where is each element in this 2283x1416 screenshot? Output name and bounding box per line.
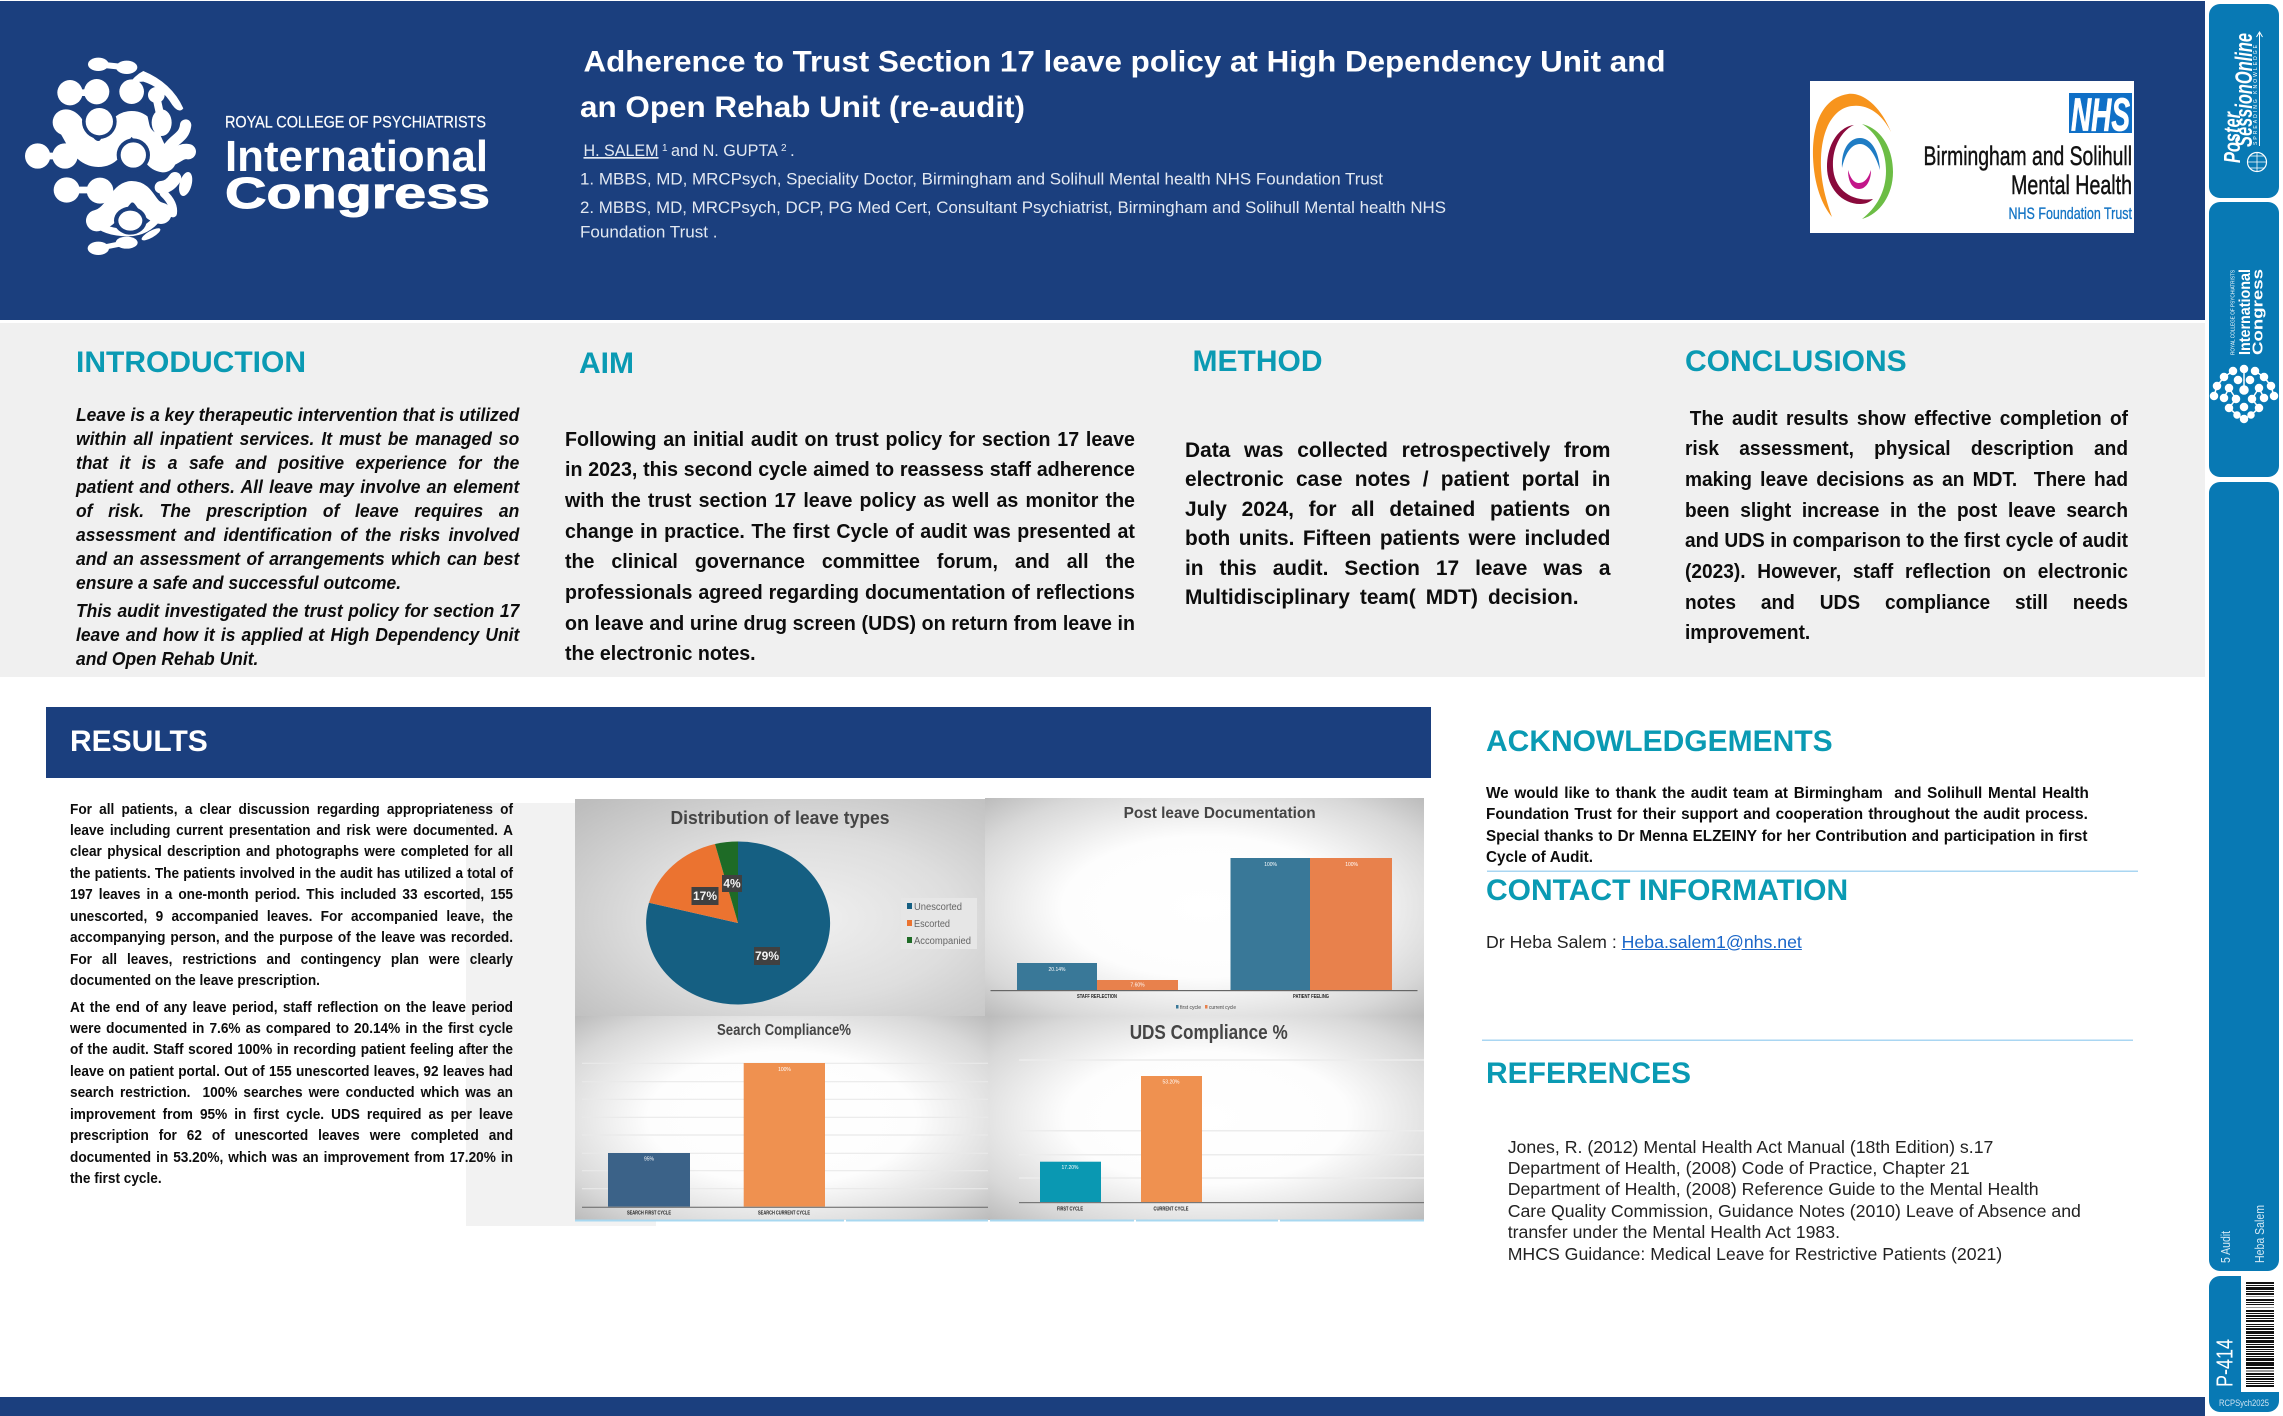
- chart: post leave documentation: 100%: [1345, 862, 1359, 868]
- logo: Birmingham and Solihull Mental Health NHS Foundation Trust: Birmingham and Solihull: [1924, 141, 2132, 171]
- chart: post leave documentation: PATIENT FEELING: [1293, 994, 1329, 1000]
- text block: introduction paragraph one: and an assessment of arrangements which can best: [76, 549, 519, 569]
- sidebar: Poster Session Online tab: Poster: [2219, 111, 2245, 163]
- chart: distribution of leave types: [575, 799, 988, 1016]
- authors and affiliations: and N. GUPTA: [671, 141, 779, 160]
- text block: acknowledgements: [1486, 785, 2089, 866]
- chart: post leave documentation: Post leave Documentation: [1124, 805, 1316, 822]
- heading: acknowledgements: ACKNOWLEDGEMENTS: [1486, 725, 1833, 758]
- chart: search compliance: 100%: [778, 1067, 791, 1073]
- chart: post leave documentation: 100%: [1264, 862, 1278, 868]
- text block: introduction paragraph one: patient and others. All leave may involve an element: [76, 477, 519, 497]
- text block: method: July 2024, for all detained patients on: [1184, 498, 1610, 521]
- text block: reference list: transfer under the Mental Health Act 1983.: [1508, 1222, 1840, 1242]
- text block: introduction paragraph two: and Open Rehab Unit.: [76, 649, 258, 669]
- text block: introduction paragraph one: of risk. The prescription of leave requires an: [76, 501, 519, 521]
- logo: Birmingham and Solihull Mental Health NHS Foundation Trust: [1810, 81, 2134, 233]
- pie labels: 17%: [693, 889, 717, 903]
- text block: conclusions: risk assessment, physical description and: [1685, 438, 2128, 460]
- text block: introduction paragraph one: Leave is a key therapeutic intervention that is utilized: [76, 405, 519, 425]
- text block: method: electronic case notes / patient portal in: [1184, 468, 1610, 491]
- sidebar: International Congress tab: Congress: [2250, 269, 2266, 355]
- pie legend: Escorted: [914, 919, 950, 930]
- results paragraph one: unescorted, 9 accompanied leaves. For accompanied leave, the: [70, 909, 513, 925]
- text block: reference list: Department of Health, (2008) Code of Practice, Chapter 21: [1508, 1158, 1970, 1178]
- panel: conclusions: [1685, 345, 2128, 644]
- results paragraph two: leave on patient portal. Out of 155 unescorted leaves, 92 leaves had: [70, 1064, 513, 1080]
- text block: method: Multidisciplinary team( MDT) decision.: [1184, 586, 1578, 609]
- chart: UDS compliance: FIRST CYCLE: [1057, 1207, 1083, 1213]
- icon: brain of dots: [2210, 366, 2278, 422]
- title: Adherence to Trust Section 17 leave policy at High Dependency Unit and: [584, 46, 1666, 79]
- chart: distribution of leave types: Distribution of leave types: [670, 808, 890, 828]
- text block: introduction paragraph two: leave and how it is applied at High Dependency Unit: [76, 625, 519, 645]
- text block: method: Data was collected retrospectively from: [1184, 439, 1610, 462]
- logo wordmark: ROYAL COLLEGE OF PSYCHIATRISTS: [225, 112, 486, 131]
- text block: acknowledgements: Foundation Trust for their support and cooperation throughout the audit process.: [1486, 806, 2088, 823]
- icon: NHS lozenge: [2069, 88, 2132, 140]
- icon: coloured swirl: [1813, 94, 1893, 219]
- text block: introduction paragraph one: within all inpatient services. It must be managed so: [76, 429, 519, 449]
- text block: aim: change in practice. The first Cycle of audit was presented at: [565, 521, 1135, 543]
- results paragraph one: clear physical description and photographs were completed for all: [70, 844, 513, 860]
- sidebar: Poster Session Online tab: SPREADING KNOWLEDGE: [2253, 44, 2259, 145]
- text block: introduction paragraph two: [76, 601, 520, 669]
- results paragraph two: search restriction. 100% searches were conducted which was an: [70, 1085, 513, 1101]
- pie legend: Unescorted: [914, 902, 962, 913]
- text block: method: in this audit. Section 17 leave was a: [1184, 557, 1610, 580]
- chart: post leave documentation: 7.60%: [1130, 982, 1145, 988]
- chart: search compliance: SEARCH FIRST CYCLE: [627, 1211, 671, 1217]
- pie: unescorted 79%: [646, 841, 830, 1004]
- text block: reference list: Department of Health, (2008) Reference Guide to the Mental Health: [1508, 1179, 2039, 1199]
- chart: post leave documentation: 20.14%: [1049, 967, 1066, 973]
- text block: acknowledgements: Special thanks to Dr Menna ELZEINY for her Contribution and participation in first: [1486, 828, 2087, 845]
- text block: conclusions: notes and UDS compliance still needs: [1685, 592, 2128, 614]
- sidebar: poster number and barcode tab: RCPSych2025: [2219, 1398, 2269, 1409]
- results paragraph two: prescription for 62 of unescorted leaves were completed and: [70, 1128, 513, 1144]
- icon: globe of linked dots: [25, 58, 195, 255]
- chart: UDS compliance: 17.20%: [1062, 1165, 1079, 1171]
- pie: accompanied 4%: [715, 841, 738, 923]
- panel: contact information: [1486, 874, 1848, 952]
- results paragraph one: 197 leaves in a one-month period. This included 33 escorted, 155: [70, 887, 513, 903]
- results paragraph one: documented on the leave prescription.: [70, 973, 320, 989]
- chart: UDS compliance: 53.20%: [1163, 1080, 1180, 1086]
- chart: UDS compliance: UDS Compliance %: [1130, 1022, 1288, 1044]
- icon: NHS lozenge: NHS: [2071, 88, 2130, 140]
- text block: introduction paragraph two: This audit investigated the trust policy for section 17: [76, 601, 519, 621]
- text block: aim: the clinical governance committee forum, and all the: [565, 551, 1135, 573]
- text block: introduction paragraph one: ensure a safe and successful outcome.: [76, 573, 401, 593]
- logo: Royal College of Psychiatrists International Congress: [25, 58, 490, 255]
- results paragraph two: were documented in 7.6% as compared to 20.14% in the first cycle: [70, 1021, 513, 1037]
- results paragraph two: the first cycle.: [70, 1171, 162, 1187]
- results paragraph two: of the audit. Staff scored 100% in recording patient feeling after the: [70, 1042, 513, 1058]
- logo: Birmingham and Solihull Mental Health NHS Foundation Trust: NHS Foundation Trust: [2008, 205, 2132, 223]
- sidebar: category and author tab: Heba Salem: [2252, 1205, 2267, 1263]
- authors and affiliations: .: [790, 141, 795, 160]
- logo wordmark: Congress: [225, 169, 490, 218]
- text block: method: both units. Fifteen patients were included: [1184, 527, 1610, 550]
- sidebar: International Congress tab: ROYAL COLLEGE OF PSYCHIATRISTS: [2230, 269, 2236, 355]
- sidebar: category and author tab: [2209, 482, 2279, 1271]
- heading: aim: AIM: [579, 347, 634, 380]
- results paragraph two: [70, 1000, 513, 1187]
- results paragraph one: For all leaves, restrictions and contingency plan were clearly: [70, 952, 513, 968]
- pie: escorted 17%: [649, 844, 738, 923]
- text block: aim: the electronic notes.: [565, 643, 756, 665]
- sidebar: poster number and barcode tab: P-414: [2212, 1339, 2238, 1387]
- footer band: [0, 1397, 2205, 1416]
- grey patch behind charts: [466, 803, 656, 1226]
- text block: aim: on leave and urine drug screen (UDS) on return from leave in: [565, 613, 1135, 635]
- pie labels: [692, 875, 780, 965]
- heading: references: REFERENCES: [1486, 1057, 1691, 1090]
- title: [580, 46, 1666, 124]
- text block: introduction paragraph one: assessment and identification of the risks involved: [76, 525, 519, 545]
- text block: aim: in 2023, this second cycle aimed to reassess staff adherence: [565, 459, 1135, 481]
- grey introduction band: [0, 323, 2205, 677]
- heading: introduction: INTRODUCTION: [76, 346, 306, 379]
- results paragraph two: At the end of any leave period, staff reflection on the leave period: [70, 1000, 513, 1016]
- authors and affiliations: H. SALEM: [584, 141, 658, 160]
- pie legend: [901, 898, 977, 949]
- text block: aim: with the trust section 17 leave policy as well as monitor the: [565, 490, 1135, 512]
- panel: method: [1184, 345, 1611, 609]
- text block: reference list: Jones, R. (2012) Mental Health Act Manual (18th Edition) s.17: [1508, 1136, 1993, 1156]
- results paragraph one: accompanying person, and the purpose of the leave was recorded.: [70, 930, 513, 946]
- text block: conclusions: improvement.: [1685, 622, 1810, 644]
- text block: method: [1184, 439, 1611, 609]
- chart: UDS compliance: CURRENT CYCLE: [1154, 1207, 1189, 1213]
- text block: conclusions: (2023). However, staff reflection on electronic: [1685, 561, 2128, 583]
- results paragraph one: the patients. The patients involved in the audit has utilized a total of: [70, 866, 513, 882]
- panel: aim: [565, 347, 1135, 665]
- text block: conclusions: [1685, 408, 2128, 644]
- panel: acknowledgements: [1486, 725, 2089, 866]
- text block: introduction paragraph one: [76, 405, 520, 593]
- results heading bar: [46, 707, 1431, 778]
- text block: acknowledgements: We would like to thank the audit team at Birmingham and Solihull Mental Health: [1486, 785, 2089, 802]
- text block: reference list: Care Quality Commission, Guidance Notes (2010) Leave of Absence and: [1508, 1201, 2081, 1221]
- text block: aim: professionals agreed regarding documentation of reflections: [565, 582, 1135, 604]
- chart: post leave documentation: STAFF REFLECTION: [1077, 994, 1117, 1000]
- text block: acknowledgements: Cycle of Audit.: [1486, 849, 1593, 866]
- panel: references: [1486, 1057, 2081, 1264]
- authors and affiliations: Foundation Trust .: [580, 223, 718, 242]
- authors and affiliations: 2. MBBS, MD, MRCPsych, DCP, PG Med Cert, Consultant Psychiatrist, Birmingham and Solihull Mental health NHS: [580, 198, 1446, 217]
- chart: post leave documentation: first cycle: [1180, 1005, 1201, 1011]
- logo wordmark: [225, 112, 490, 218]
- authors and affiliations: 1. MBBS, MD, MRCPsych, Speciality Doctor, Birmingham and Solihull Mental health NHS Foundation Trust: [580, 170, 1383, 188]
- barcode: [2246, 1282, 2274, 1387]
- chart: search compliance: [575, 1016, 989, 1220]
- chart: search compliance: Search Compliance%: [717, 1022, 851, 1039]
- sidebar: International Congress tab: International: [2237, 269, 2254, 355]
- text block: conclusions: making leave decisions as an MDT. There had: [1685, 469, 2128, 491]
- text block: results narrative: [70, 802, 514, 1187]
- heading: method: METHOD: [1192, 345, 1322, 378]
- heading: conclusions: CONCLUSIONS: [1685, 345, 1907, 378]
- logo wordmark: International: [225, 132, 488, 181]
- results paragraph two: improvement from 95% in first cycle. UDS required as per leave: [70, 1107, 513, 1123]
- pie labels: 4%: [723, 876, 741, 890]
- text block: introduction paragraph one: that it is a safe and positive experience for the: [76, 453, 519, 473]
- heading: contact information: CONTACT INFORMATION: [1486, 874, 1848, 907]
- text block: reference list: [1508, 1136, 2081, 1264]
- text block: conclusions: The audit results show effective completion of: [1690, 408, 2128, 430]
- authors and affiliations: 2: [781, 143, 787, 154]
- panel: introduction: [76, 346, 520, 669]
- sidebar: category and author tab: 5 Audit: [2218, 1231, 2233, 1263]
- authors and affiliations: 1: [662, 143, 668, 154]
- logo: Birmingham and Solihull Mental Health NHS Foundation Trust: Mental Health: [2011, 170, 2132, 200]
- chart: UDS compliance: [989, 1016, 1424, 1220]
- header band: [0, 1, 2205, 320]
- sidebar: Poster Session Online tab: [2209, 4, 2279, 198]
- results paragraph one: For all patients, a clear discussion regarding appropriateness of: [70, 802, 513, 818]
- authors and affiliations: [580, 141, 1446, 242]
- text block: aim: Following an initial audit on trust policy for section 17 leave: [565, 429, 1135, 451]
- results paragraph one: [70, 802, 514, 989]
- text block: conclusions: been slight increase in the post leave search: [1685, 500, 2128, 522]
- pie labels: 79%: [755, 949, 779, 963]
- results paragraph one: leave including current presentation and risk were documented. A: [70, 823, 513, 839]
- sidebar: International Congress tab: [2209, 202, 2279, 477]
- chart: post leave documentation: [985, 798, 1424, 1016]
- pie legend: Accompanied: [914, 936, 971, 947]
- sidebar: poster number and barcode tab: [2209, 1276, 2283, 1412]
- chart: search compliance: 95%: [644, 1156, 655, 1162]
- text block: reference list: MHCS Guidance: Medical Leave for Restrictive Patients (2021): [1508, 1244, 2002, 1264]
- text block: conclusions: and UDS in comparison to the first cycle of audit: [1685, 530, 2128, 552]
- text block: aim: [565, 429, 1135, 665]
- heading: results: RESULTS: [70, 725, 208, 758]
- title: an Open Rehab Unit (re-audit): [580, 91, 1025, 124]
- chart: search compliance: SEARCH CURRENT CYCLE: [758, 1211, 810, 1217]
- results paragraph two: documented in 53.20%, which was an improvement from 17.20% in: [70, 1150, 513, 1166]
- text block: contact details: Dr Heba Salem : Heba.salem1@nhs.net: [1486, 932, 1802, 952]
- chart: post leave documentation: current cycle: [1209, 1005, 1236, 1011]
